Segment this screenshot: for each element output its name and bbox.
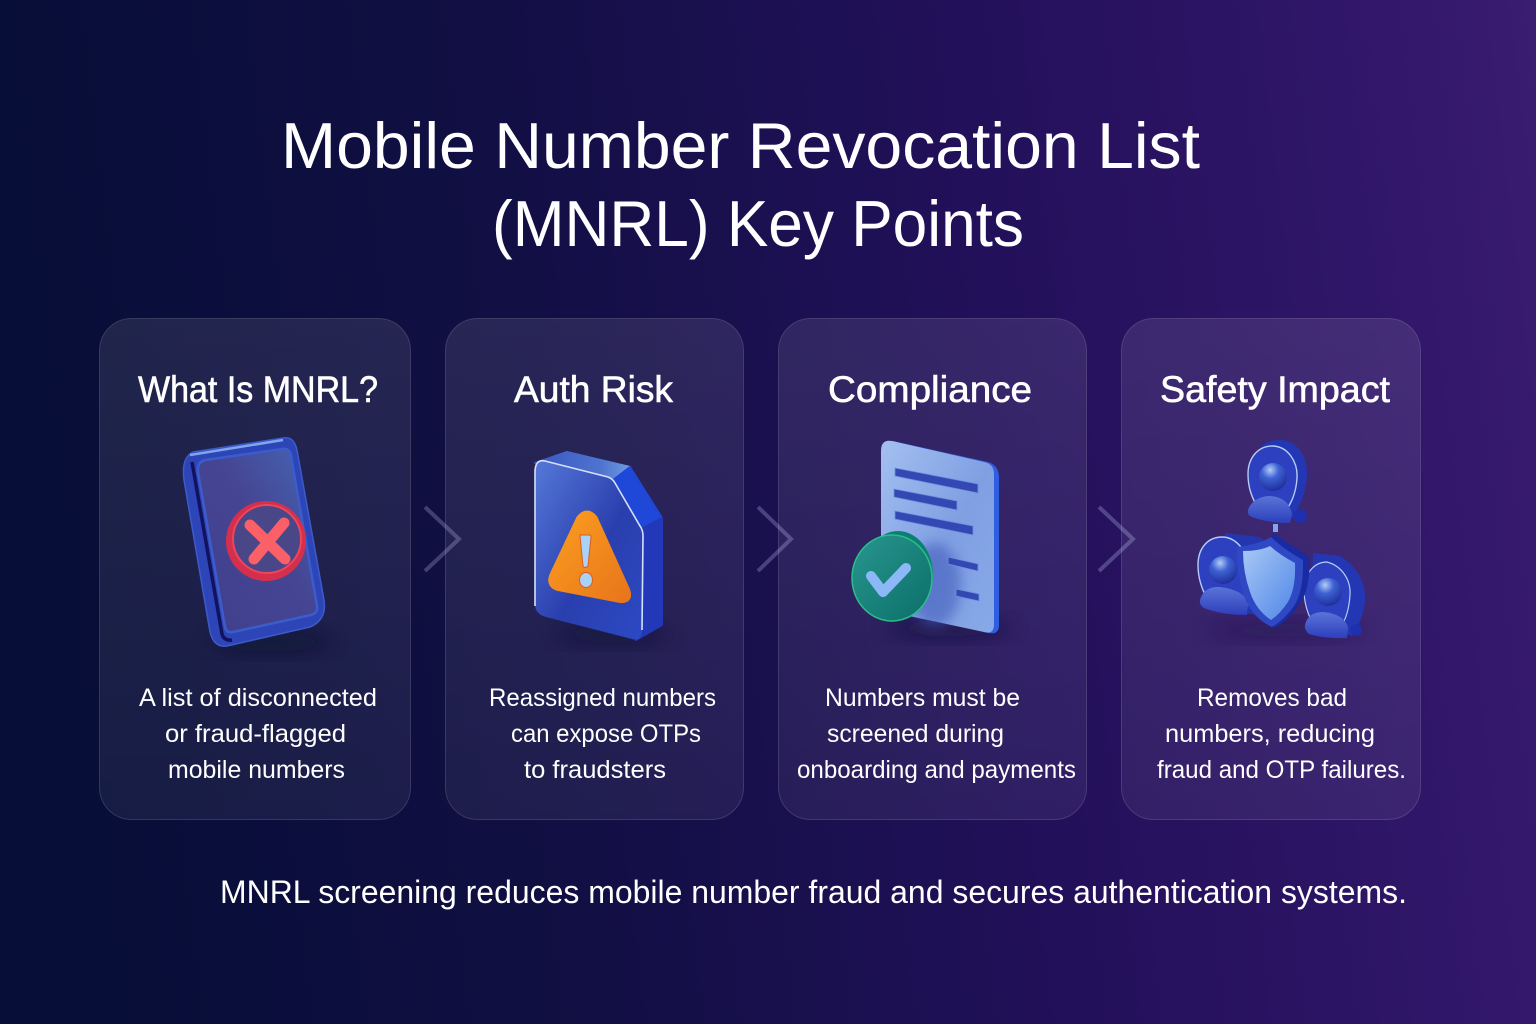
title: (MNRL) Key Points	[492, 187, 1024, 260]
heading: Safety Impact: Safety Impact	[1160, 369, 1391, 410]
icon: people with shield	[1198, 440, 1365, 638]
body text: numbers, reducing	[1165, 720, 1375, 748]
heading: Auth Risk: Auth Risk	[514, 369, 673, 410]
body text: onboarding and payments	[797, 756, 1076, 784]
body text: to fraudsters	[524, 756, 666, 784]
body text: or fraud-flagged	[165, 720, 346, 748]
title	[281, 109, 1200, 260]
heading: Compliance: Compliance	[828, 369, 1032, 410]
body text: screened during	[827, 720, 1004, 748]
shield	[1237, 533, 1310, 628]
panel: Auth Risk	[446, 318, 744, 820]
footer statement: MNRL screening reduces mobile number fraud and secures authentication systems.	[220, 874, 1407, 910]
body text: Reassigned numbers	[489, 684, 716, 712]
arrow 2	[758, 507, 791, 571]
arrow 1	[425, 507, 459, 571]
body text: Removes bad	[1197, 684, 1347, 712]
body text	[139, 684, 377, 784]
body text	[797, 684, 1076, 784]
left person	[1198, 533, 1285, 615]
body text: Numbers must be	[825, 684, 1020, 712]
arrow 3	[1099, 507, 1133, 571]
panel: What Is MNRL?	[100, 318, 410, 820]
body text	[1157, 684, 1406, 784]
body text: can expose OTPs	[511, 720, 701, 748]
body text	[489, 684, 716, 784]
icon: SIM card with warning triangle	[535, 452, 668, 643]
body text: fraud and OTP failures.	[1157, 756, 1406, 784]
panel: Safety Impact	[1122, 318, 1420, 820]
body text: mobile numbers	[168, 756, 345, 784]
body text: A list of disconnected	[139, 684, 377, 712]
heading: What Is MNRL?: What Is MNRL?	[138, 369, 378, 410]
panel: Compliance	[778, 318, 1086, 820]
icon: document with green check badge	[852, 441, 1012, 637]
top person	[1248, 440, 1307, 532]
right person	[1304, 553, 1365, 638]
icon: phone with red X	[183, 438, 332, 652]
title: Mobile Number Revocation List	[281, 109, 1200, 182]
